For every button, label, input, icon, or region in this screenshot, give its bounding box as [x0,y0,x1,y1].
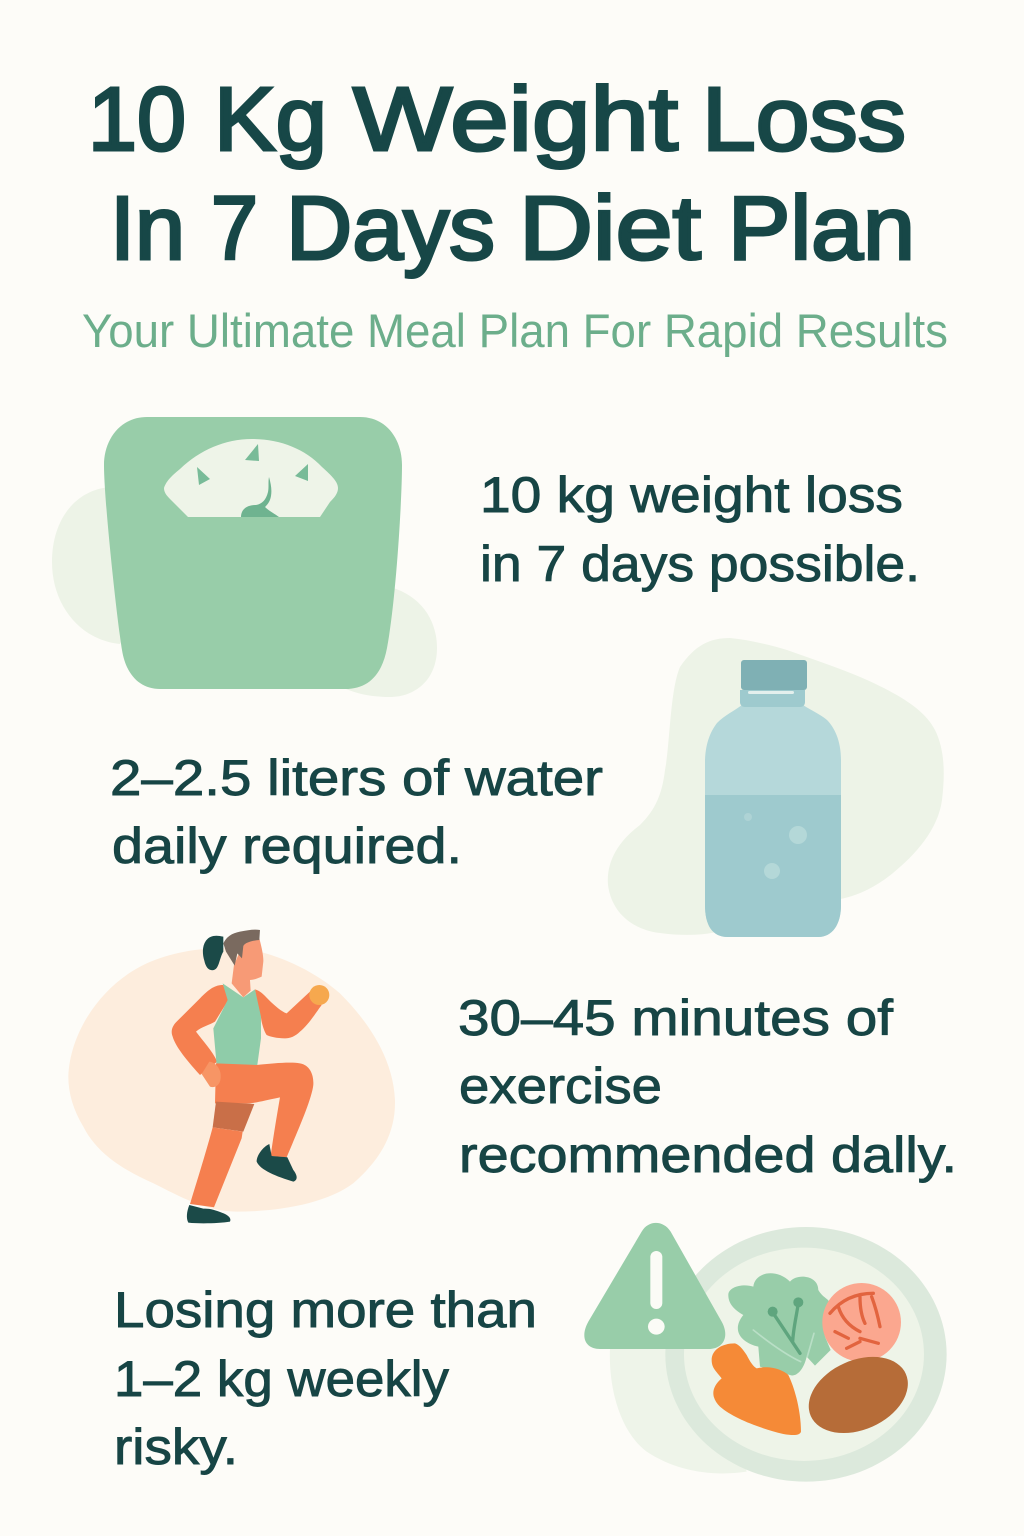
ponytail [203,936,223,970]
text: exercise recommendation: exercise [459,1058,662,1114]
exclamation mark [650,1251,662,1309]
planted shoe [187,1205,230,1223]
title: Loss [702,70,906,170]
text: water requirement: 2–2.5 liters of water [110,750,603,806]
peach background blob [68,948,395,1212]
title: Kg [214,70,327,170]
tomato [822,1283,901,1362]
carrot [712,1343,801,1435]
text: risk warning: Losing more than [114,1282,537,1338]
icon: exercising woman [68,930,395,1223]
warning triangle [584,1223,725,1349]
front arm [255,989,322,1038]
text: weight loss claim [480,467,920,592]
icon: water bottle [608,638,944,937]
text: water requirement [110,750,603,874]
text: risk warning [114,1282,537,1475]
text: exercise recommendation: 30–45 minutes of [458,990,893,1046]
plate centre [684,1248,924,1461]
title: Plan [728,179,915,279]
title: 10 [88,70,186,170]
title: Weight [353,70,678,170]
text: weight loss claim: 10 kg weight loss [480,467,903,523]
text: weight loss claim: in 7 days possible. [480,536,920,592]
hand on hip [202,1062,221,1087]
fist [309,985,329,1005]
icon: warning and food plate [584,1223,947,1482]
text: risk warning: 1–2 kg weekly [114,1351,449,1407]
potato [797,1342,920,1448]
back arm [172,985,228,1075]
text: exercise recommendation: recommended dally. [459,1127,957,1183]
neck and face [232,938,263,997]
title: In [110,179,185,279]
title: 7 [211,179,258,279]
pale blob [610,1348,747,1473]
tomato lines [830,1293,880,1348]
icon: bathroom scale [52,417,437,697]
text: risk warning: risky. [114,1419,238,1475]
title [88,70,915,279]
hair [223,930,260,966]
title: Days [286,179,495,279]
lettuce veins [753,1297,814,1362]
title: Diet [519,179,701,279]
raised shoe [257,1144,297,1182]
text: water requirement: daily required. [112,818,462,874]
standing leg [190,1127,243,1207]
plate rim [665,1227,947,1482]
lettuce [728,1273,831,1375]
subtitle: Your Ultimate Meal Plan For Rapid Results [82,304,948,357]
shaded thigh [213,1102,254,1132]
raised leg [215,1063,313,1157]
text: exercise recommendation [458,990,957,1183]
vest [213,983,261,1065]
